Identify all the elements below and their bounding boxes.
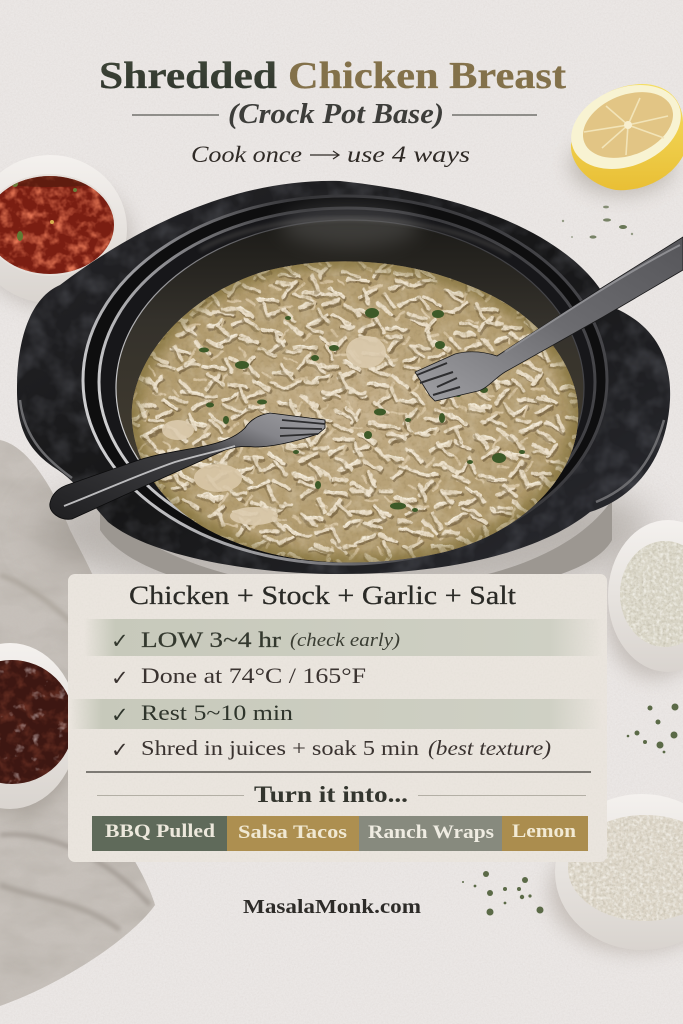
title: Chicken Breast [288,55,566,97]
step: done temperature: ✓ [111,666,129,690]
step: low time: (check early) [290,630,400,651]
step: rest: ✓ [111,703,129,727]
step: rest: Rest 5~10 min [141,700,293,725]
step: shred: (best texture) [428,736,551,760]
fork: left [50,413,325,519]
herb scatter [462,206,678,916]
bowl: salsa [0,155,133,308]
mottled rim finish [10,175,675,580]
linen cloth [0,430,160,1020]
tag: Lemon: Lemon [512,821,576,842]
tagline [191,142,470,167]
steam [280,203,420,247]
inner well [116,220,584,556]
tag: BBQ Pulled [92,816,227,851]
row bands [70,619,602,729]
step: rest [111,700,293,727]
step: shred: Shred in juices + soak 5 min [141,736,420,760]
step: low time [111,627,400,653]
pot shadow [35,460,655,600]
title [99,55,566,97]
step: shred: ✓ [111,738,129,762]
bowl: ranch powder [550,794,683,952]
tag: Salsa Tacos: Salsa Tacos [238,822,347,843]
tagline: use 4 ways [347,142,470,167]
bowl: herb powder [605,520,683,678]
tagline: Cook once [191,142,302,167]
footer website: MasalaMonk.com [243,896,421,918]
step: low time: ✓ [111,629,129,653]
tag: Ranch Wraps [359,816,502,851]
title: Shredded [99,55,277,97]
fork: right [415,237,683,401]
shredded chicken [132,261,578,562]
ingredients heading: Chicken + Stock + Garlic + Salt [129,581,517,610]
step: done temperature [111,663,366,690]
step: done temperature: Done at 74°C / 165°F [141,663,366,688]
tag: Lemon [502,816,588,851]
step: low time: LOW 3~4 hr [141,627,282,652]
section heading: turn it into: Turn it into... [254,782,408,807]
slow cooker [10,175,675,600]
tag: BBQ Pulled: BBQ Pulled [105,821,215,842]
tag: Salsa Tacos [227,816,359,851]
lemon half [559,69,683,195]
outer rim and handles [17,181,670,574]
ceramic base [100,500,612,600]
bowl: bbq sauce [0,643,68,814]
tag: Ranch Wraps: Ranch Wraps [368,822,494,843]
rim rings [83,196,607,564]
panel: recipe card [68,574,607,862]
handle highlights [20,400,664,502]
subtitle with rules: (Crock Pot Base) [228,99,444,130]
step: shred [111,736,551,762]
